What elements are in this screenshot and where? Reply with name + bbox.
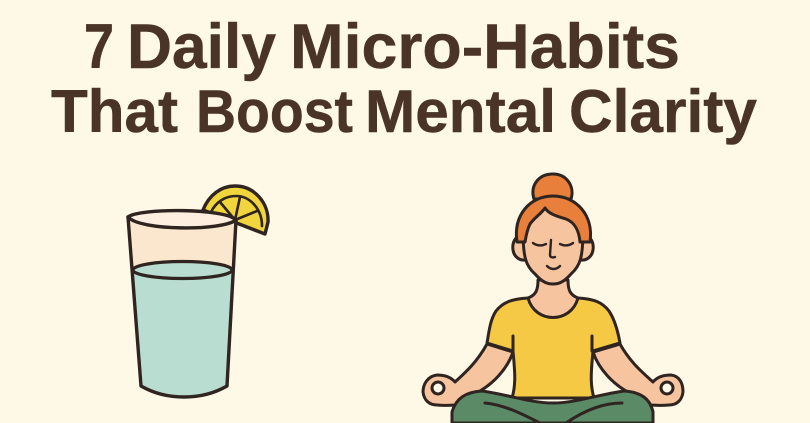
closed eyes, nose and smile xyxy=(533,240,573,269)
left arm and hand xyxy=(423,344,513,405)
icon: meditating woman xyxy=(423,174,683,423)
sleeve lines xyxy=(513,336,592,351)
hand rings xyxy=(432,382,444,394)
hair xyxy=(516,196,591,242)
title: Mental xyxy=(365,77,556,145)
icon: glass of water with lemon xyxy=(128,186,268,397)
title: Daily xyxy=(127,12,276,82)
water xyxy=(133,269,232,397)
leg folds xyxy=(485,403,622,423)
glass outline xyxy=(128,217,236,397)
hair bun xyxy=(533,174,572,199)
title: 7 xyxy=(84,12,114,82)
legs xyxy=(452,391,653,423)
glass rim xyxy=(128,211,236,228)
shirt xyxy=(487,298,620,398)
water surface xyxy=(133,262,232,278)
title: Clarity xyxy=(569,77,757,145)
title: Boost xyxy=(196,77,353,145)
right arm and hand xyxy=(593,344,683,405)
ears xyxy=(513,236,526,260)
title: That xyxy=(51,77,178,145)
face xyxy=(523,205,583,284)
title: Micro-Habits xyxy=(290,12,680,82)
title xyxy=(51,12,757,145)
glass body xyxy=(128,217,236,397)
neck xyxy=(528,280,578,318)
lemon slice xyxy=(203,186,268,234)
